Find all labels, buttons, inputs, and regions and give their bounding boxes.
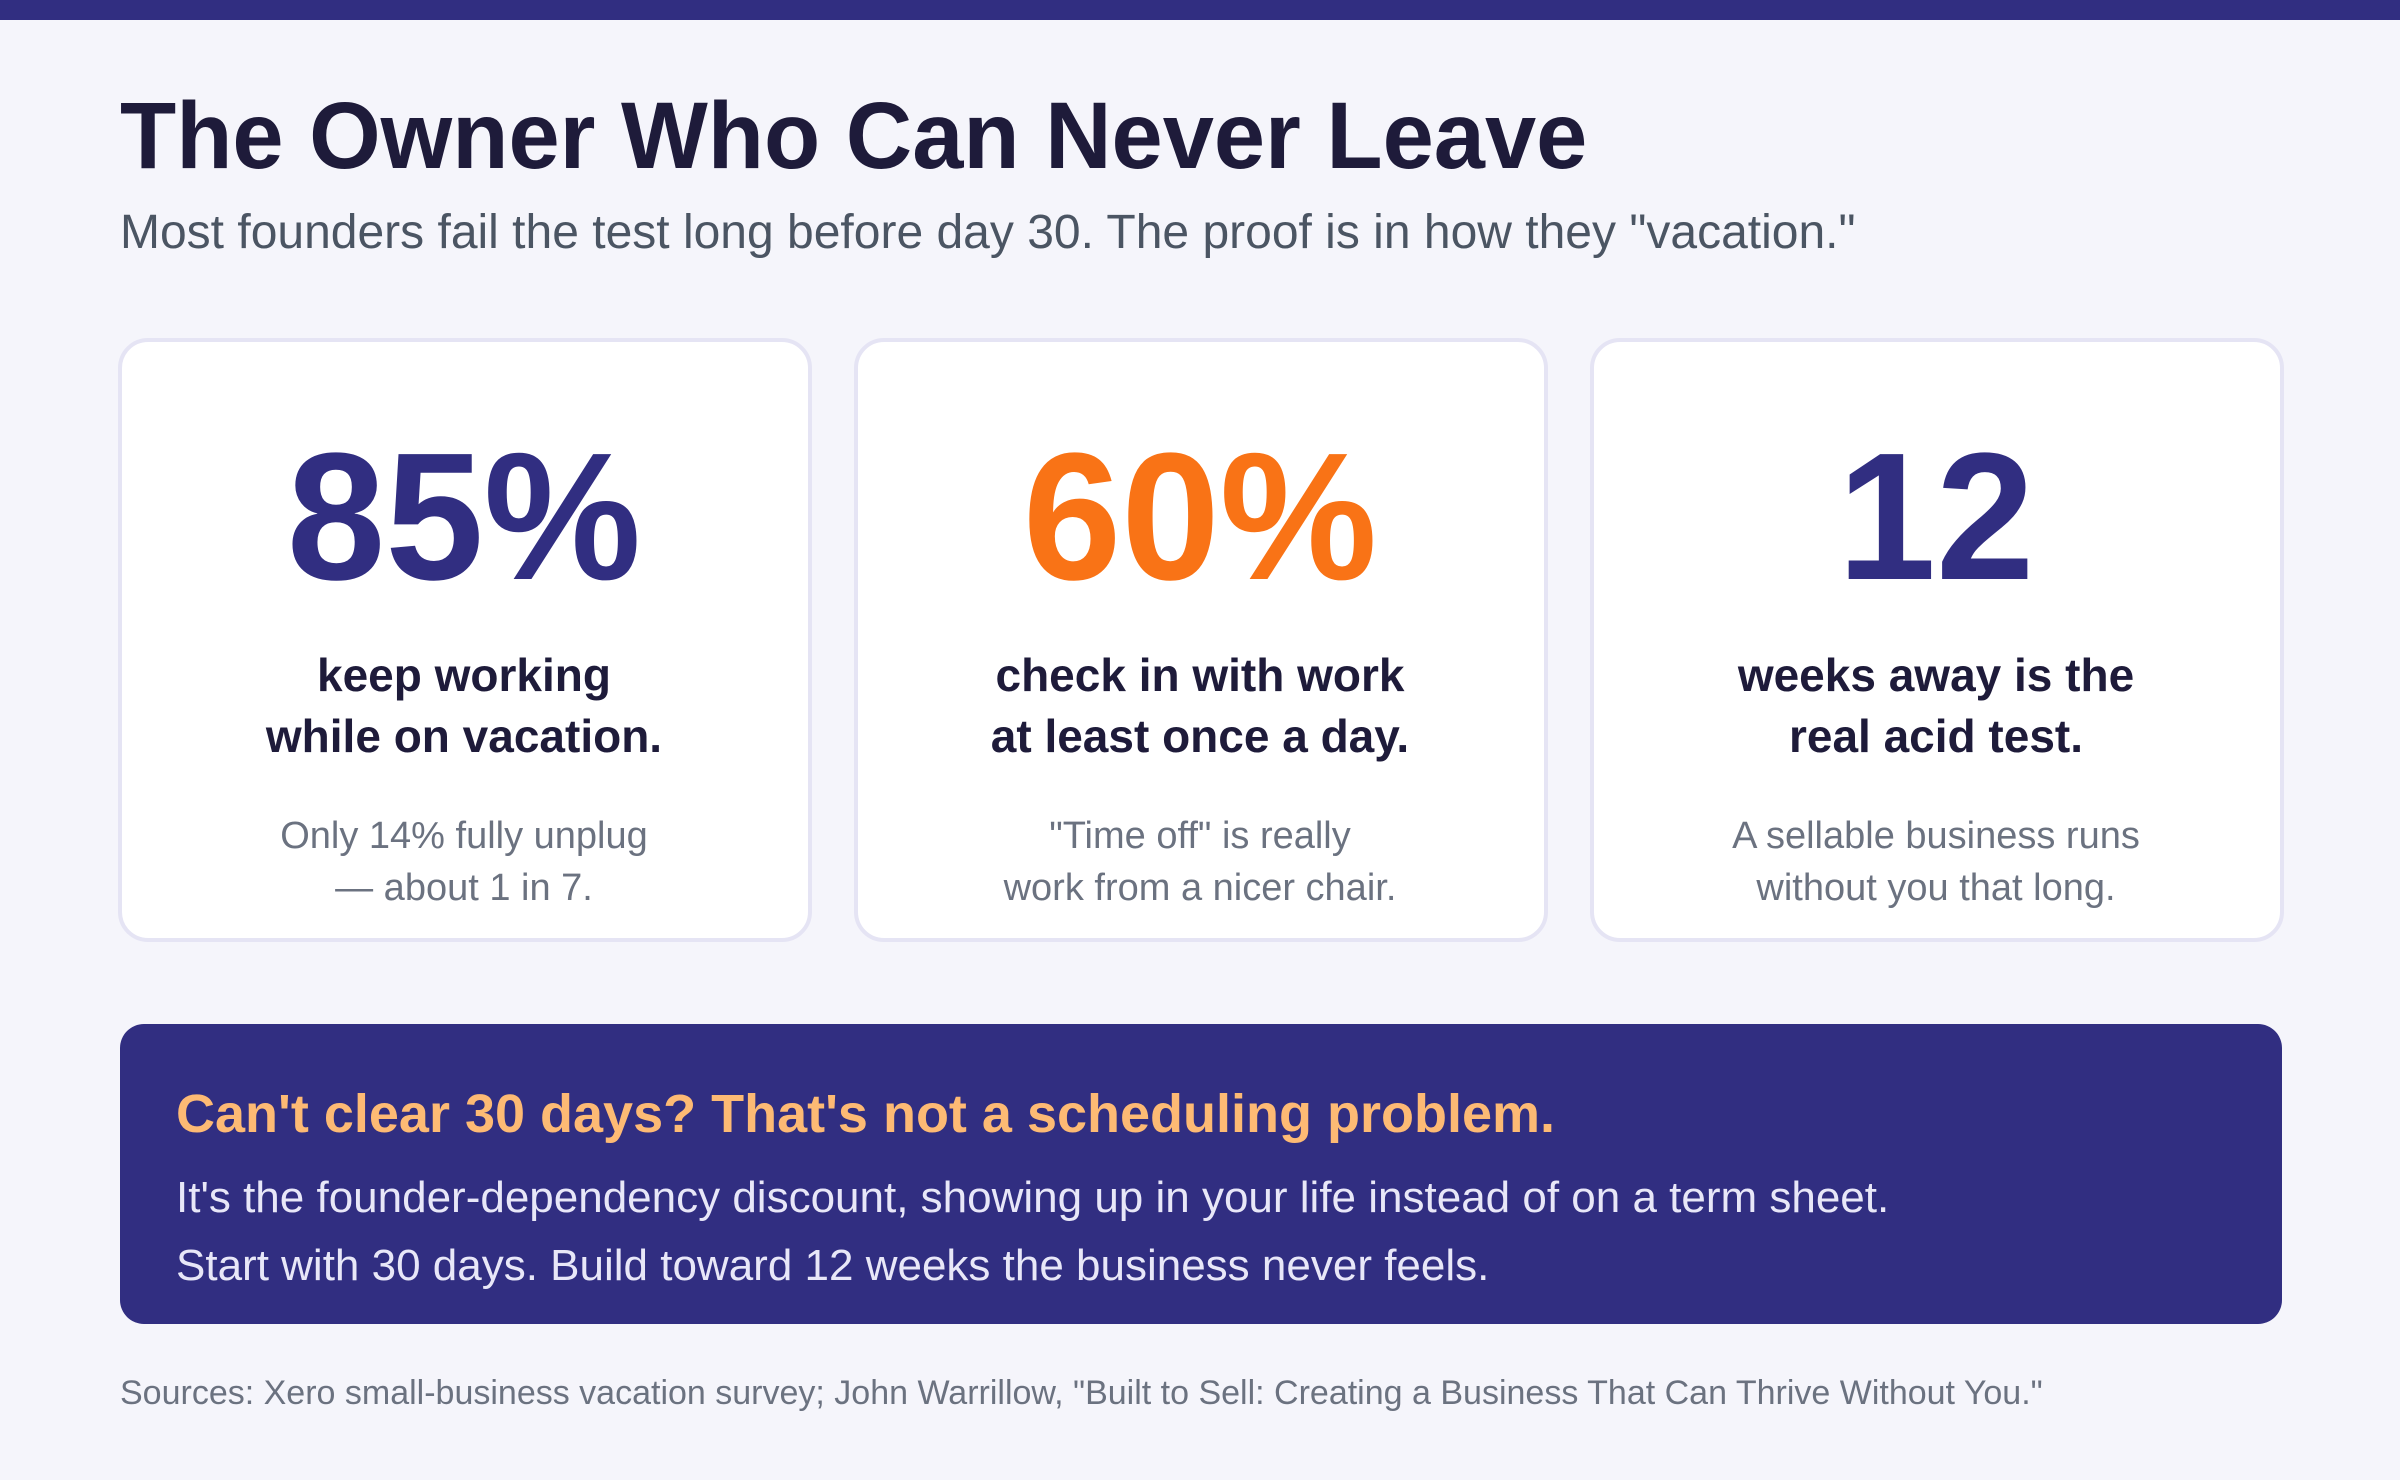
stat label: check in with work <box>996 649 1404 701</box>
stat note <box>280 815 648 909</box>
panel: callout banner <box>120 1024 2282 1324</box>
stat note: — about 1 in 7. <box>335 867 593 909</box>
callout body <box>176 1173 1889 1290</box>
stat note <box>1732 815 2140 909</box>
stat label: weeks away is the <box>1738 649 2134 701</box>
callout body: It's the founder-dependency discount, showing up in your life instead of on a term sheet. <box>176 1173 1889 1222</box>
stat label <box>266 649 662 762</box>
title: The Owner Who Can Never Leave <box>120 83 1587 188</box>
callout body: Start with 30 days. Build toward 12 weeks the business never feels. <box>176 1241 1489 1290</box>
top accent bar <box>0 0 2400 20</box>
panel: stat card 12 weeks <box>1590 338 2284 942</box>
stat note: A sellable business runs <box>1732 815 2140 857</box>
stat note: "Time off" is really <box>1049 815 1351 857</box>
stat label: real acid test. <box>1789 710 2083 762</box>
stat number: 85% <box>287 415 641 618</box>
stat note: without you that long. <box>1756 867 2116 909</box>
stat number: 12 <box>1838 415 2034 618</box>
subtitle: Most founders fail the test long before day 30. The proof is in how they "vacation." <box>120 206 1856 259</box>
stat number: 60% <box>1023 415 1377 618</box>
callout heading: Can't clear 30 days? That's not a scheduling problem. <box>176 1084 1555 1144</box>
stat label <box>991 649 1409 762</box>
stat note: work from a nicer chair. <box>1004 867 1396 909</box>
sources footnote: Sources: Xero small-business vacation survey; John Warrillow, "Built to Sell: Creating a Business That Can Thrive Without You." <box>120 1374 2043 1412</box>
stat label: while on vacation. <box>266 710 662 762</box>
panel: stat card 85% <box>118 338 812 942</box>
panel: stat card 60% <box>854 338 1548 942</box>
stat label: at least once a day. <box>991 710 1409 762</box>
stat label: keep working <box>317 649 611 701</box>
stat label <box>1738 649 2134 762</box>
stat note: Only 14% fully unplug <box>280 815 648 857</box>
stat note <box>1004 815 1396 909</box>
